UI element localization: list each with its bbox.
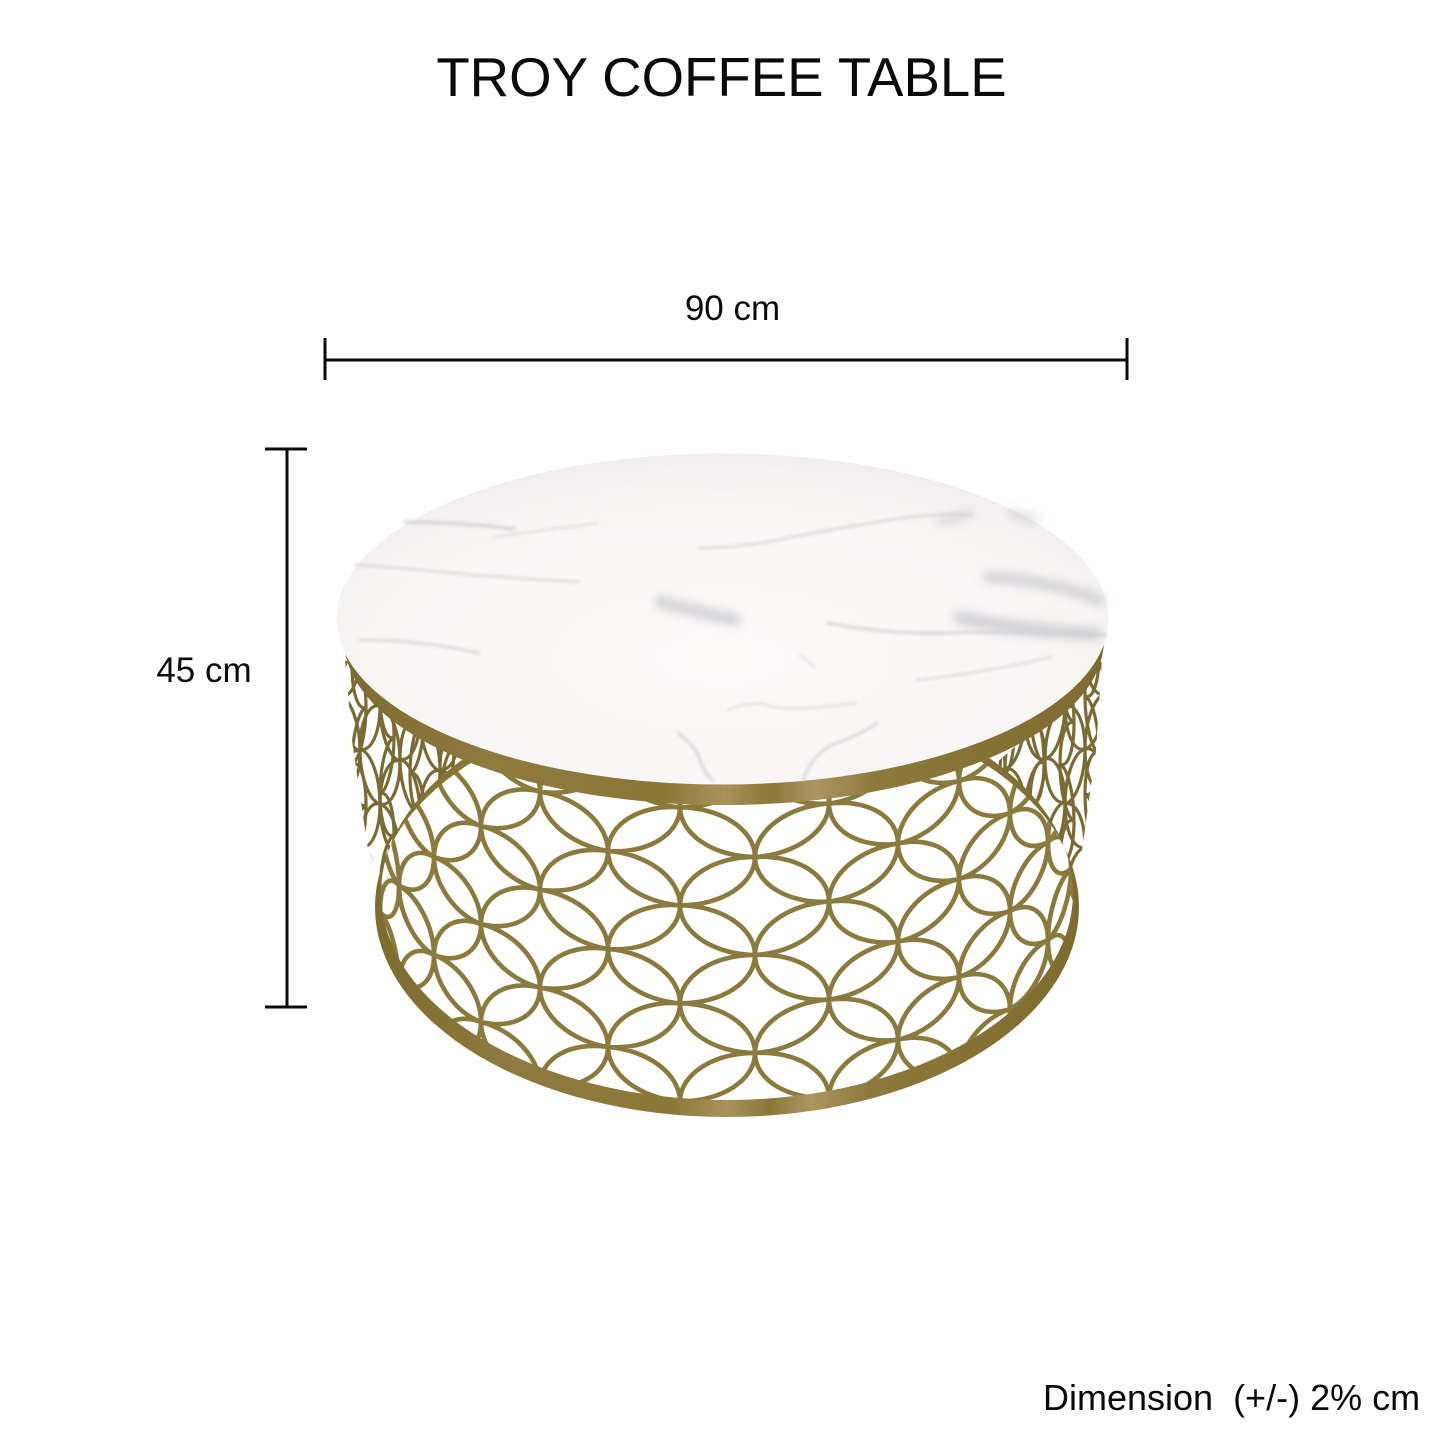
top gold band — [344, 475, 1104, 805]
coffee table illustration — [336, 454, 1108, 1117]
height label: 45 cm: 45 cm — [156, 651, 252, 690]
back lattice seen through left side — [345, 660, 456, 872]
width label: 90 cm: 90 cm — [685, 289, 780, 328]
marble veins — [355, 513, 1106, 780]
title: TROY COFFEE TABLE — [436, 47, 1007, 108]
back lattice seen through right side — [998, 661, 1102, 866]
interior opening behind front lattice — [377, 697, 1077, 1109]
width dimension arrow — [325, 338, 1127, 380]
dimension tolerance note: Dimension (+/-) 2% cm — [1043, 1377, 1420, 1418]
bottom gold ring — [375, 686, 1079, 1117]
front gold lattice of overlapping circles — [381, 764, 1073, 1100]
height dimension arrow — [265, 449, 307, 1007]
marble table top — [336, 454, 1108, 784]
